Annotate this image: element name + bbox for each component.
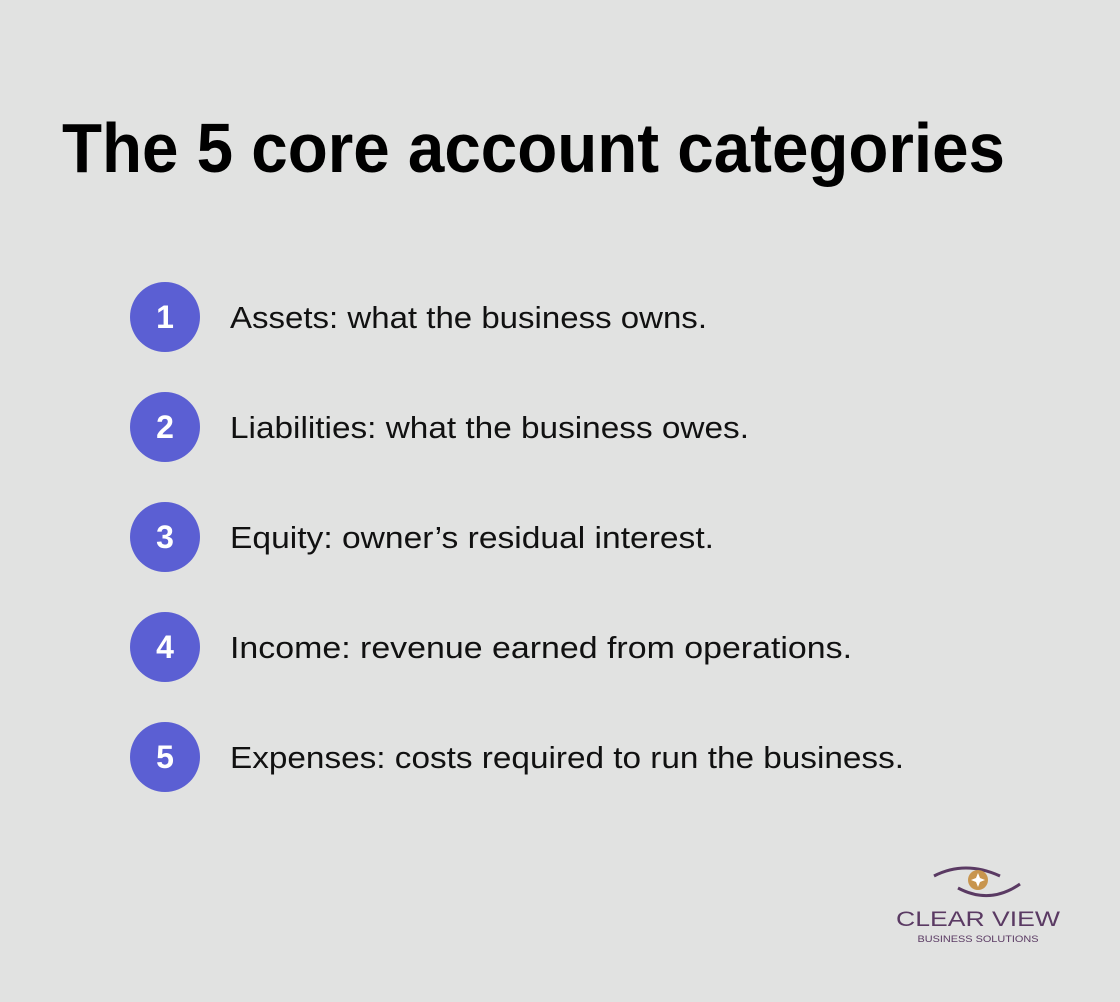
title: The 5 core account categories [62, 109, 1005, 187]
list [130, 282, 904, 792]
item 4: Income: revenue earned from operations. [230, 630, 852, 665]
item 5: 5 [156, 739, 174, 775]
logo [896, 868, 1060, 944]
item 3: 3 [156, 519, 174, 555]
item 5: Expenses: costs required to run the business. [230, 740, 904, 775]
logo: CLEAR VIEW [896, 908, 1060, 931]
item 3 [130, 502, 714, 572]
item 1: 1 [156, 299, 174, 335]
item 4: 4 [156, 629, 174, 665]
item 4 [130, 612, 852, 682]
icon: eye [934, 868, 1020, 896]
item 3: Equity: owner’s residual interest. [230, 520, 714, 555]
item 2: 2 [156, 409, 174, 445]
item 1 [130, 282, 707, 352]
item 2 [130, 392, 749, 462]
item 1: Assets: what the business owns. [230, 300, 707, 335]
item 5 [130, 722, 904, 792]
logo: BUSINESS SOLUTIONS [918, 934, 1038, 944]
item 2: Liabilities: what the business owes. [230, 410, 749, 445]
